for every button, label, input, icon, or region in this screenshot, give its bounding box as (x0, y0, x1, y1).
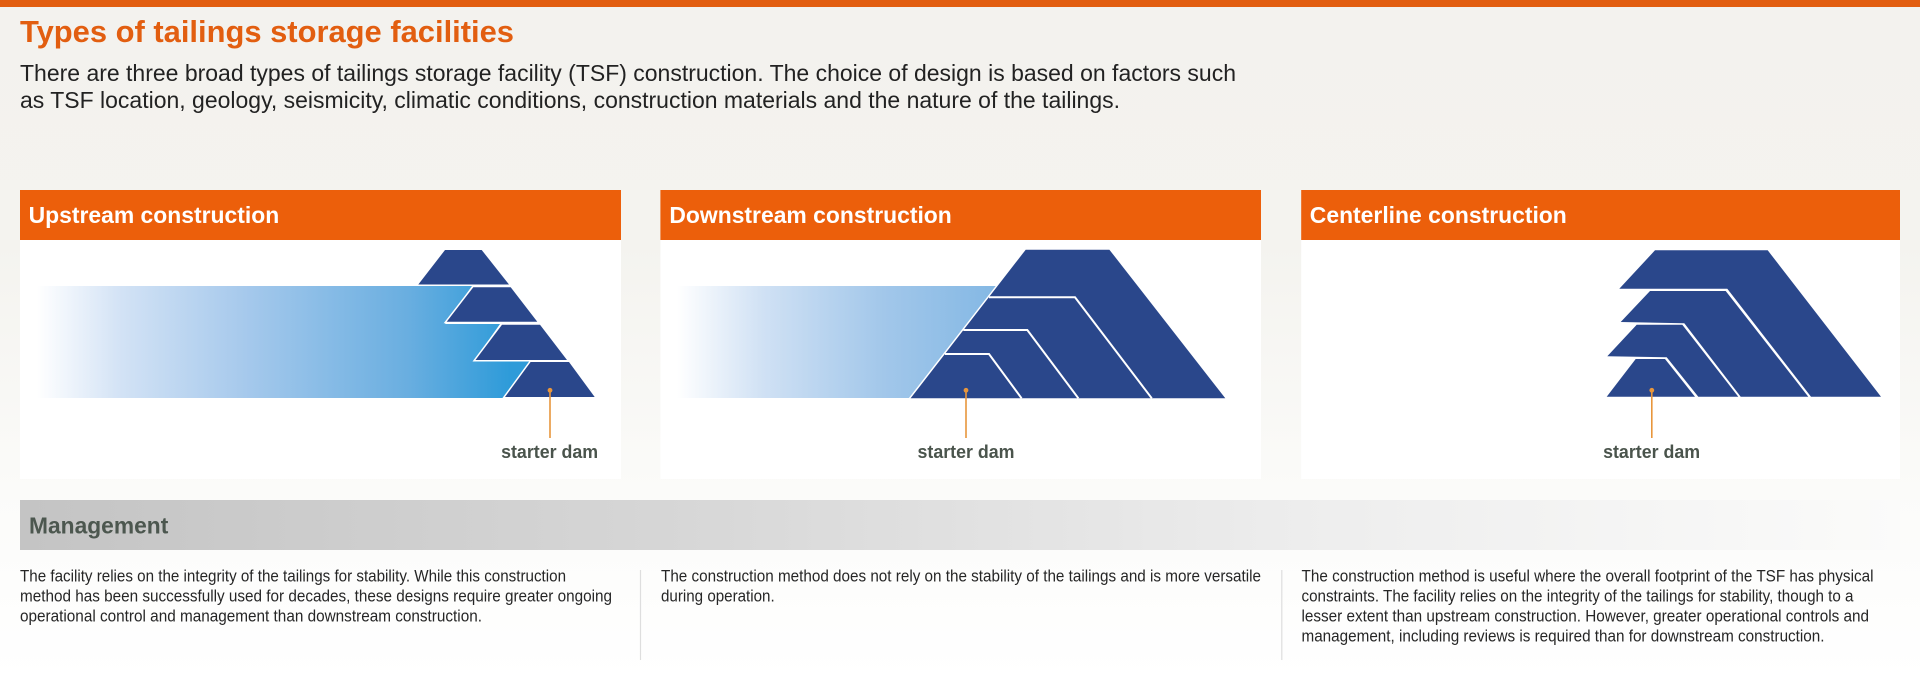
management text: upstream: operational control and management than downstream construction. (20, 608, 482, 626)
management text: downstream: during operation. (661, 588, 775, 606)
starter dam label: starter dam (918, 442, 1014, 462)
starter dam label: starter dam (501, 442, 598, 462)
management text: centerline: The construction method is useful where the overall footprint of the TSF has physical (1302, 568, 1874, 586)
title: Types of tailings storage facilities (20, 14, 514, 49)
intro text: as TSF location, geology, seismicity, climatic conditions, construction materials and the nature of the tailings. (20, 87, 1120, 113)
upstream header (20, 190, 621, 240)
top accent bar (0, 0, 1920, 7)
tailings gradient (37, 286, 530, 398)
panel: downstream construction (660, 190, 1261, 479)
management text: upstream: method has been successfully used for decades, these designs require greater ongoing (20, 588, 612, 606)
management text: centerline: management, including reviews is required than for downstream construction. (1302, 628, 1824, 646)
panel: centerline construction (1301, 190, 1900, 479)
downstream header: Downstream construction (669, 202, 952, 228)
management text: downstream: The construction method does not rely on the stability of the tailings and is more versatile (661, 568, 1261, 586)
management text: upstream (20, 568, 612, 626)
tailings gradient (677, 286, 996, 398)
management band (20, 500, 1900, 550)
intro text (20, 60, 1236, 113)
downstream header (660, 190, 1261, 240)
starter dam label (918, 388, 1014, 462)
management text: centerline: constraints. The facility relies on the integrity of the tailings for stability, though to a (1302, 588, 1854, 606)
management text: centerline: lesser extent than upstream construction. However, greater operational controls and (1302, 608, 1869, 626)
upstream header: Upstream construction (29, 202, 279, 228)
management text: centerline (1302, 568, 1874, 646)
upstream dam raises (418, 250, 595, 397)
downstream dam (911, 250, 1225, 398)
panel: upstream construction (20, 190, 621, 479)
centerline header (1301, 190, 1900, 240)
starter dam label: starter dam (1603, 442, 1700, 462)
starter dam label (501, 388, 598, 462)
starter dam label (1603, 388, 1700, 462)
centerline dam (1607, 250, 1881, 397)
management band: Management (29, 513, 168, 539)
centerline header: Centerline construction (1310, 202, 1567, 228)
management text: upstream: The facility relies on the integrity of the tailings for stability. While this construction (20, 568, 566, 586)
management text: downstream (661, 568, 1261, 606)
intro text: There are three broad types of tailings storage facility (TSF) construction. The choice of design is based on factors such (20, 60, 1236, 86)
